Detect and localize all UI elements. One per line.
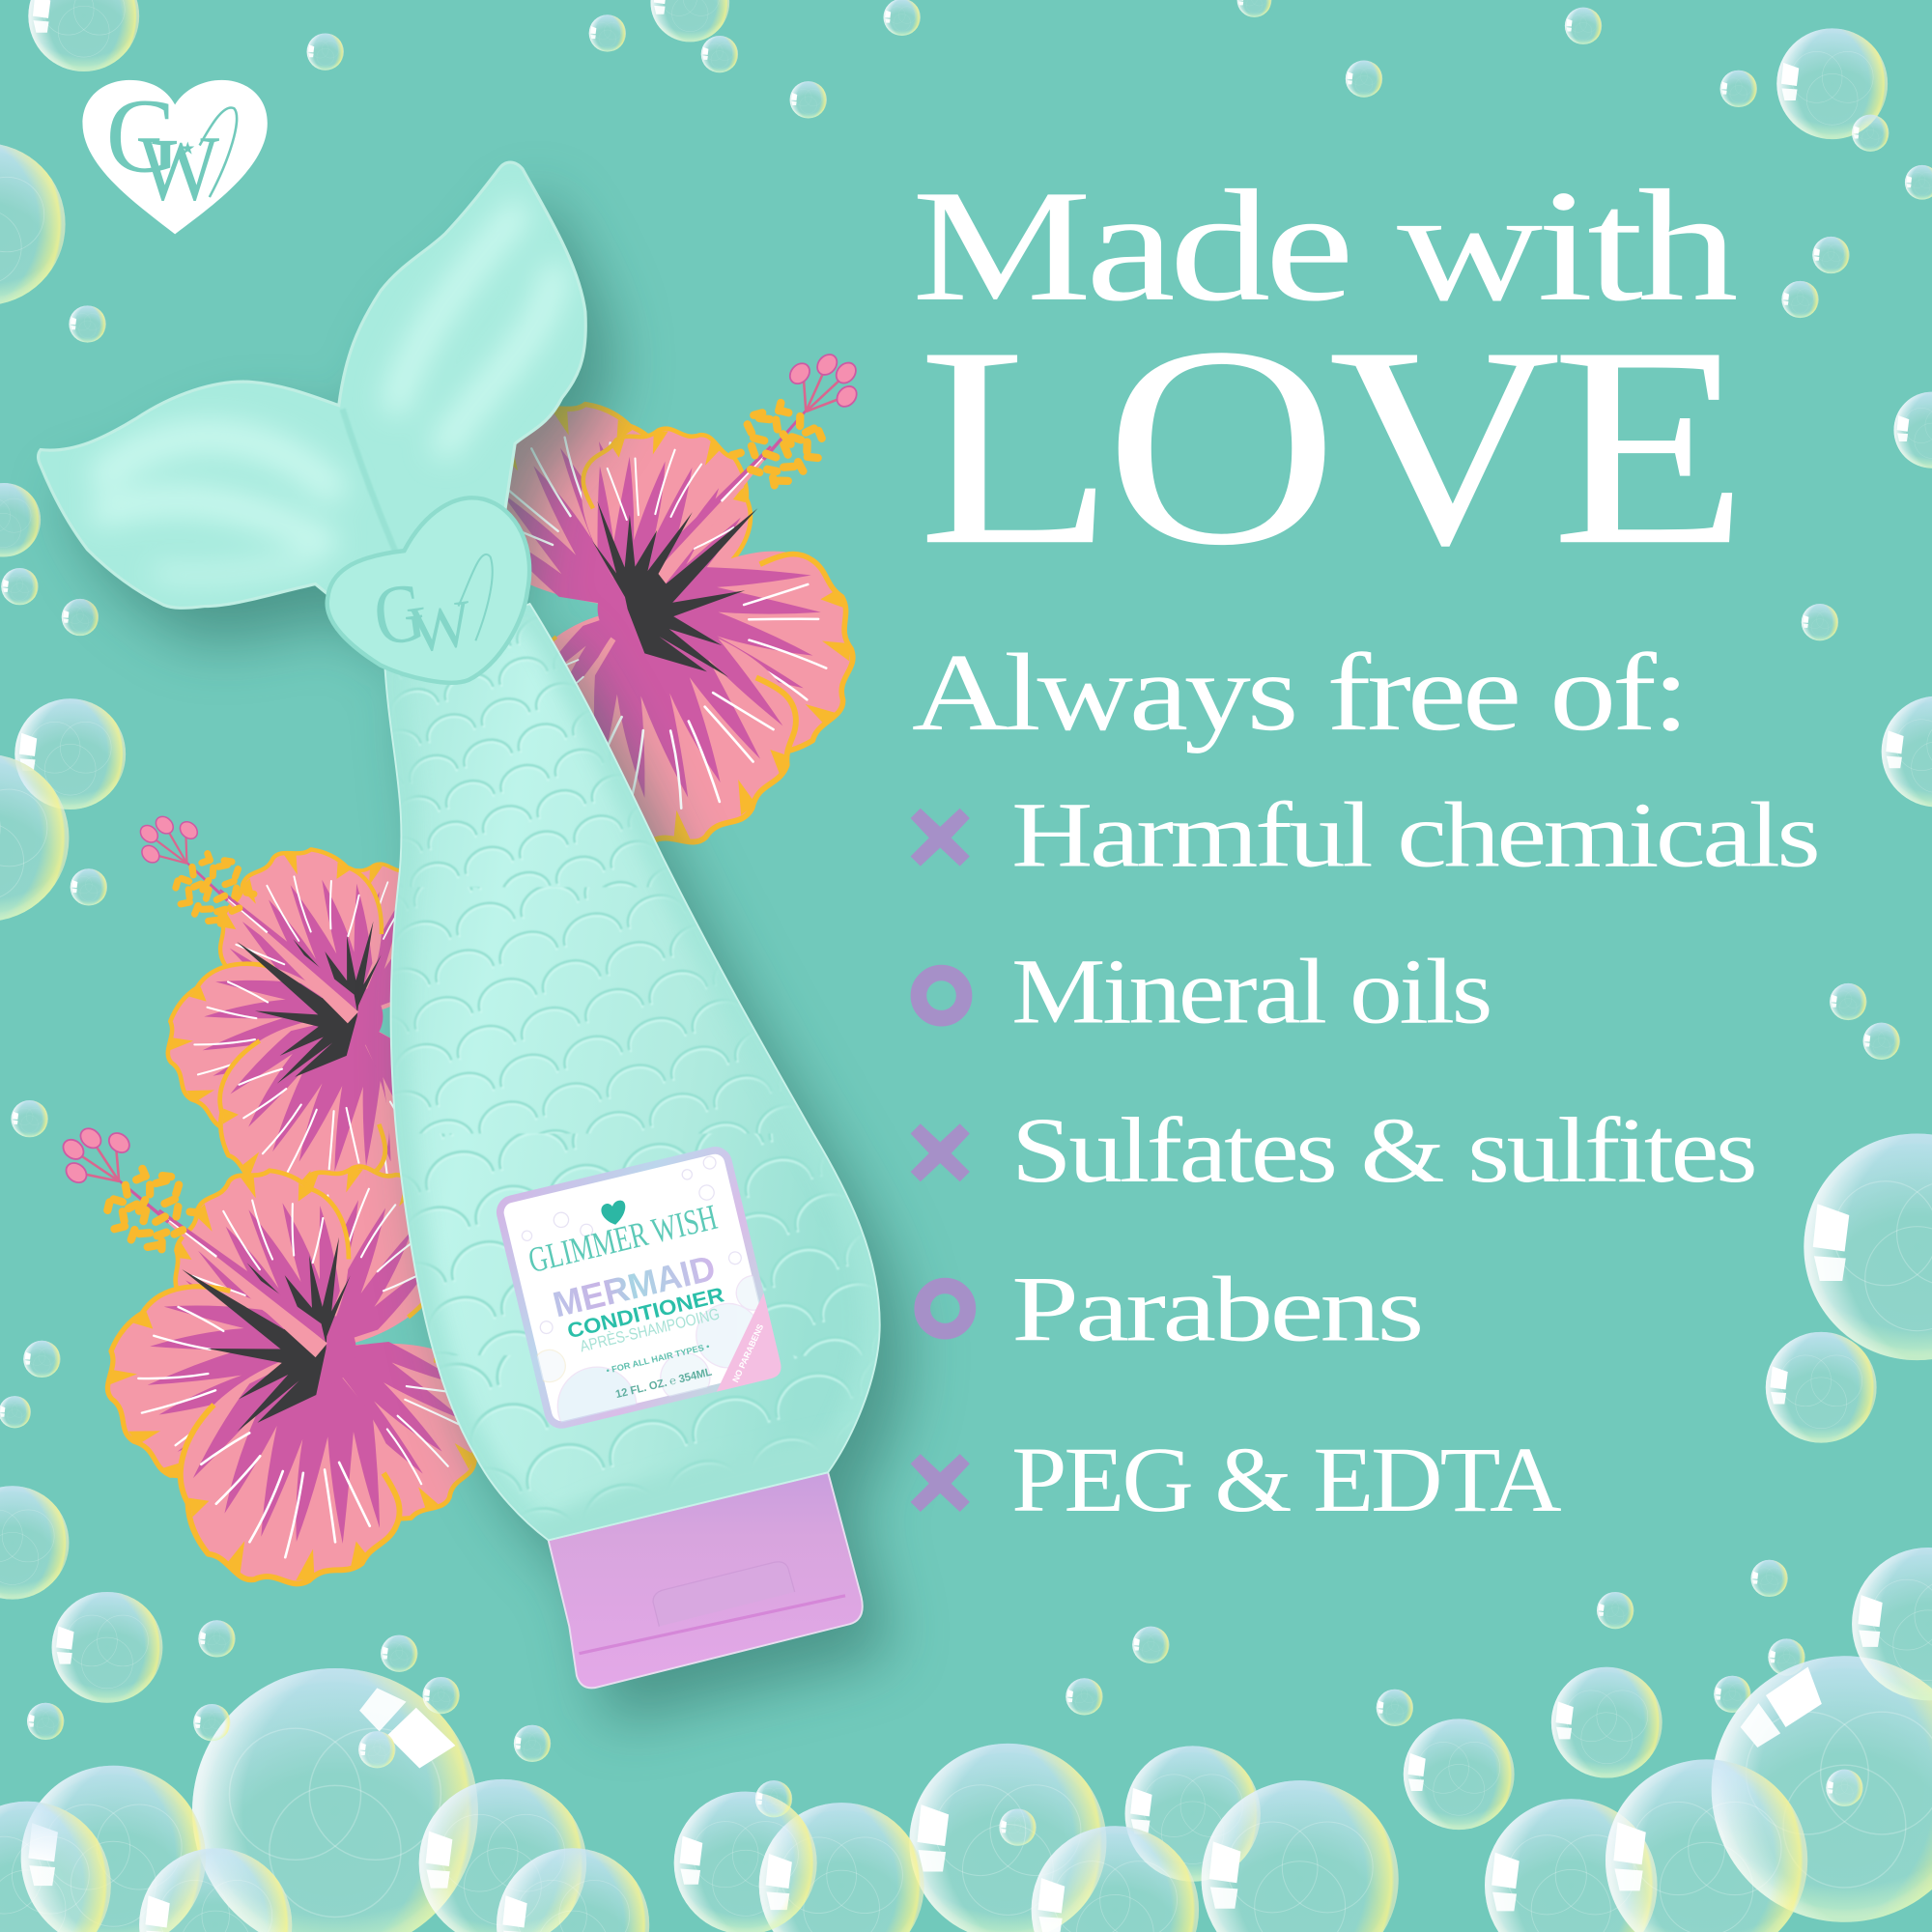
bottle shadow xyxy=(66,197,907,1722)
item: mineral oils: Mineral oils xyxy=(1011,940,1490,1043)
label heart logo xyxy=(600,1200,629,1227)
bubbles: bottom left xyxy=(0,1592,649,1932)
logo: GW heart: ★ xyxy=(180,138,195,157)
bubbles: right side xyxy=(1766,28,1932,1443)
flower: hibiscus middle left xyxy=(122,800,470,1228)
heart emblem: W xyxy=(405,585,476,668)
heading: Made with: Made with xyxy=(912,156,1736,334)
product: mermaid conditioner bottle xyxy=(39,162,887,1688)
icon: circle xyxy=(923,1286,968,1331)
bubbles: top xyxy=(28,0,1757,118)
icon: cross xyxy=(911,809,970,867)
bubbles: left side xyxy=(0,143,126,1600)
bottle body with scales xyxy=(370,591,887,1565)
icon: cross xyxy=(911,1123,970,1181)
flower: hibiscus lower left xyxy=(43,1109,526,1607)
label product type: CONDITIONER xyxy=(565,1282,726,1343)
mermaid tail fins xyxy=(39,162,585,629)
heart emblem: G xyxy=(368,564,430,664)
logo: GW heart: W xyxy=(138,117,220,220)
product label xyxy=(497,1147,781,1429)
label corner banner: NO PARABENS xyxy=(730,1322,765,1384)
label volume: 12 FL. OZ. ℮ 354ML xyxy=(614,1367,713,1401)
icon: cross xyxy=(911,1454,970,1512)
heading: LOVE: LOVE xyxy=(918,288,1739,605)
heart emblem xyxy=(327,497,529,683)
label hair types: • FOR ALL HAIR TYPES • xyxy=(605,1342,710,1376)
logo: GW heart xyxy=(82,76,268,234)
flower: hibiscus top right xyxy=(438,336,886,872)
label brand name: GLIMMER WISH xyxy=(525,1197,721,1280)
logo: GW heart: G xyxy=(106,76,180,194)
item: harmful chemicals: Harmful chemicals xyxy=(1011,783,1818,887)
item: parabens: Parabens xyxy=(1011,1258,1421,1361)
list: free-from items xyxy=(911,783,1818,1531)
icon: circle xyxy=(919,973,964,1018)
item: sulfates and sulfites: Sulfates & sulfites xyxy=(1011,1098,1755,1202)
label product name: MERMAID xyxy=(550,1248,719,1324)
label french name: APRÈS-SHAMPOOING xyxy=(578,1304,722,1355)
item: PEG and EDTA: PEG & EDTA xyxy=(1011,1428,1562,1531)
bubbles: bottom right xyxy=(1065,1548,1932,1932)
bottle cap xyxy=(549,1472,863,1688)
subheading: Always free of: Always free of: xyxy=(912,631,1686,753)
bubbles: bottom centre xyxy=(674,1744,1399,1932)
label corner banner xyxy=(696,1293,783,1392)
